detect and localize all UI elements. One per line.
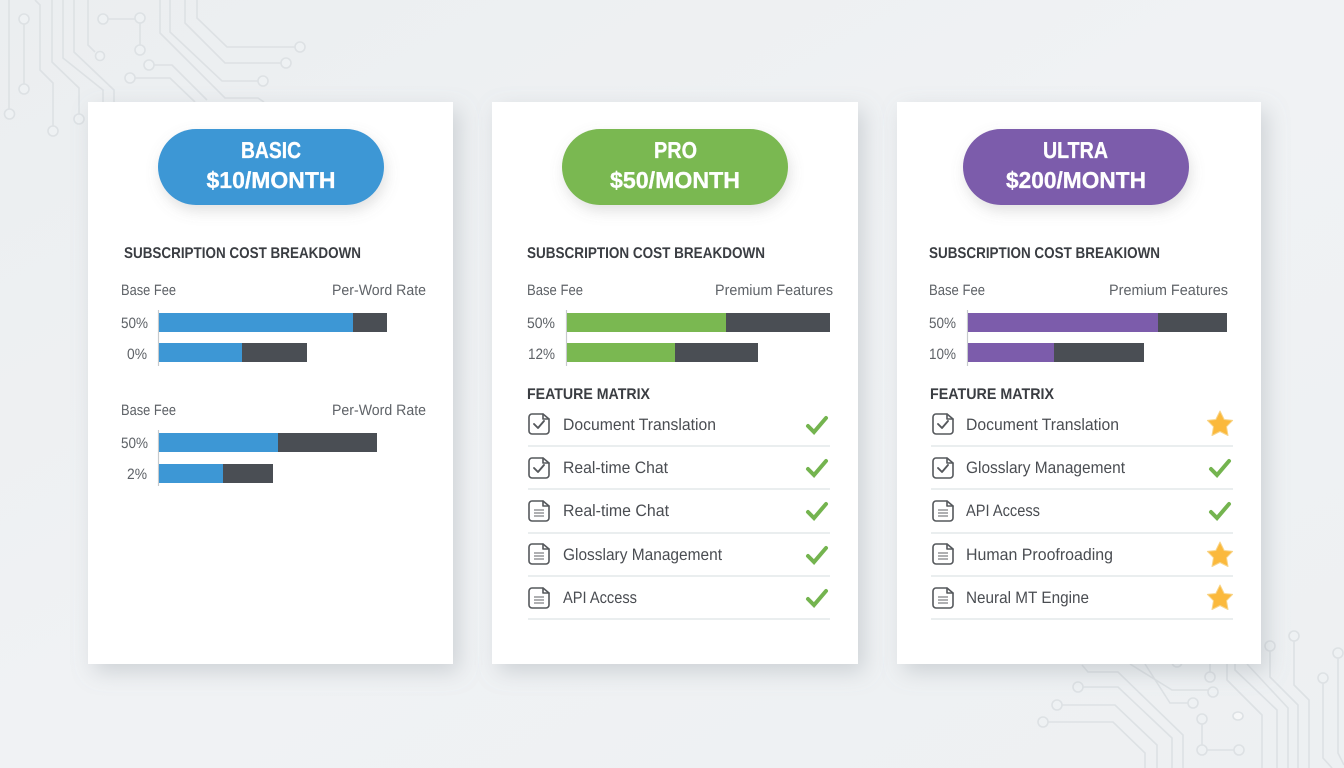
- pro card background: [492, 102, 858, 664]
- basic price pill: BASIC: [241, 137, 301, 163]
- basic bar chart 1: [121, 282, 426, 366]
- basic bar chart 2: Base Fee: [121, 402, 176, 419]
- row: document translation: [529, 414, 826, 434]
- row: neural mt engine: Neural MT Engine: [966, 589, 1089, 607]
- ultra bar chart: 50%: [929, 315, 956, 332]
- row: real-time chat second: Real-time Chat: [563, 502, 669, 520]
- row: glosslary management: [529, 544, 826, 564]
- row: glosslary management: [933, 458, 1229, 478]
- row: document translation: Document Translation: [563, 416, 716, 434]
- ultra price pill: [963, 129, 1189, 205]
- pro heading: SUBSCRIPTION COST BREAKDOWN: [527, 245, 765, 262]
- basic bar chart 1: 0%: [127, 346, 147, 363]
- ultra bar chart: Base Fee: [929, 282, 985, 299]
- ultra card background: [897, 102, 1261, 664]
- pro feature matrix heading: FEATURE MATRIX: [527, 386, 651, 403]
- pro price pill: [562, 129, 788, 205]
- row: neural mt engine: [933, 585, 1233, 610]
- basic card background: [88, 102, 453, 664]
- basic bar chart 2: Per-Word Rate: [332, 402, 426, 419]
- row: real-time chat: Real-time Chat: [563, 459, 668, 477]
- pro bar chart: 12%: [528, 346, 555, 363]
- ultra bar chart: Premium Features: [1109, 282, 1228, 299]
- basic heading: SUBSCRIPTION COST BREAKDOWN: [124, 245, 361, 262]
- row: api access: API Access: [563, 589, 637, 607]
- pro price pill: $50/MONTH: [610, 167, 740, 193]
- row: real-time chat: [529, 458, 826, 478]
- row: api access: [933, 501, 1229, 521]
- row: glosslary management: Glosslary Management: [563, 546, 722, 564]
- basic bar chart 1: Base Fee: [121, 282, 176, 299]
- row: document translation: [933, 411, 1233, 436]
- basic bar chart 1: Per-Word Rate: [332, 282, 426, 299]
- basic bar chart 2: [121, 402, 426, 486]
- pro bar chart: Premium Features: [715, 282, 833, 299]
- ultra price pill: $200/MONTH: [1006, 167, 1146, 193]
- ultra price pill: ULTRA: [1043, 137, 1108, 163]
- basic price pill: [158, 129, 384, 205]
- pro bar chart: [527, 282, 833, 366]
- pro price pill: PRO: [654, 137, 697, 163]
- basic price pill: $10/MONTH: [206, 167, 336, 193]
- row: api access: API Access: [966, 502, 1040, 520]
- row: document translation: Document Translation: [966, 416, 1119, 434]
- ultra feature matrix heading: FEATURE MATRIX: [930, 386, 1055, 403]
- circuit pattern: bottom right: [1038, 631, 1344, 768]
- ultra bar chart: [929, 282, 1228, 366]
- ultra heading: SUBSCRIPTION COST BREAKIOWN: [929, 245, 1160, 262]
- basic bar chart 2: 2%: [127, 466, 147, 483]
- row: api access: [529, 588, 826, 608]
- row: human proofroading: Human Proofroading: [966, 546, 1113, 564]
- pro feature matrix: [528, 414, 830, 619]
- row: glosslary management: Glosslary Management: [966, 459, 1125, 477]
- pro bar chart: 50%: [527, 315, 555, 332]
- panel: ultra plan: [897, 102, 1261, 664]
- basic bar chart 2: 50%: [121, 435, 148, 452]
- circuit pattern: top left: [4, 0, 305, 136]
- panel: basic plan: [88, 102, 453, 664]
- row: human proofroading: [933, 542, 1233, 566]
- row: real-time chat second: [529, 501, 826, 521]
- ultra bar chart: 10%: [929, 346, 956, 363]
- basic bar chart 1: 50%: [121, 315, 148, 332]
- panel: pro plan: [492, 102, 858, 664]
- pro bar chart: Base Fee: [527, 282, 583, 299]
- ultra feature matrix: [931, 411, 1233, 619]
